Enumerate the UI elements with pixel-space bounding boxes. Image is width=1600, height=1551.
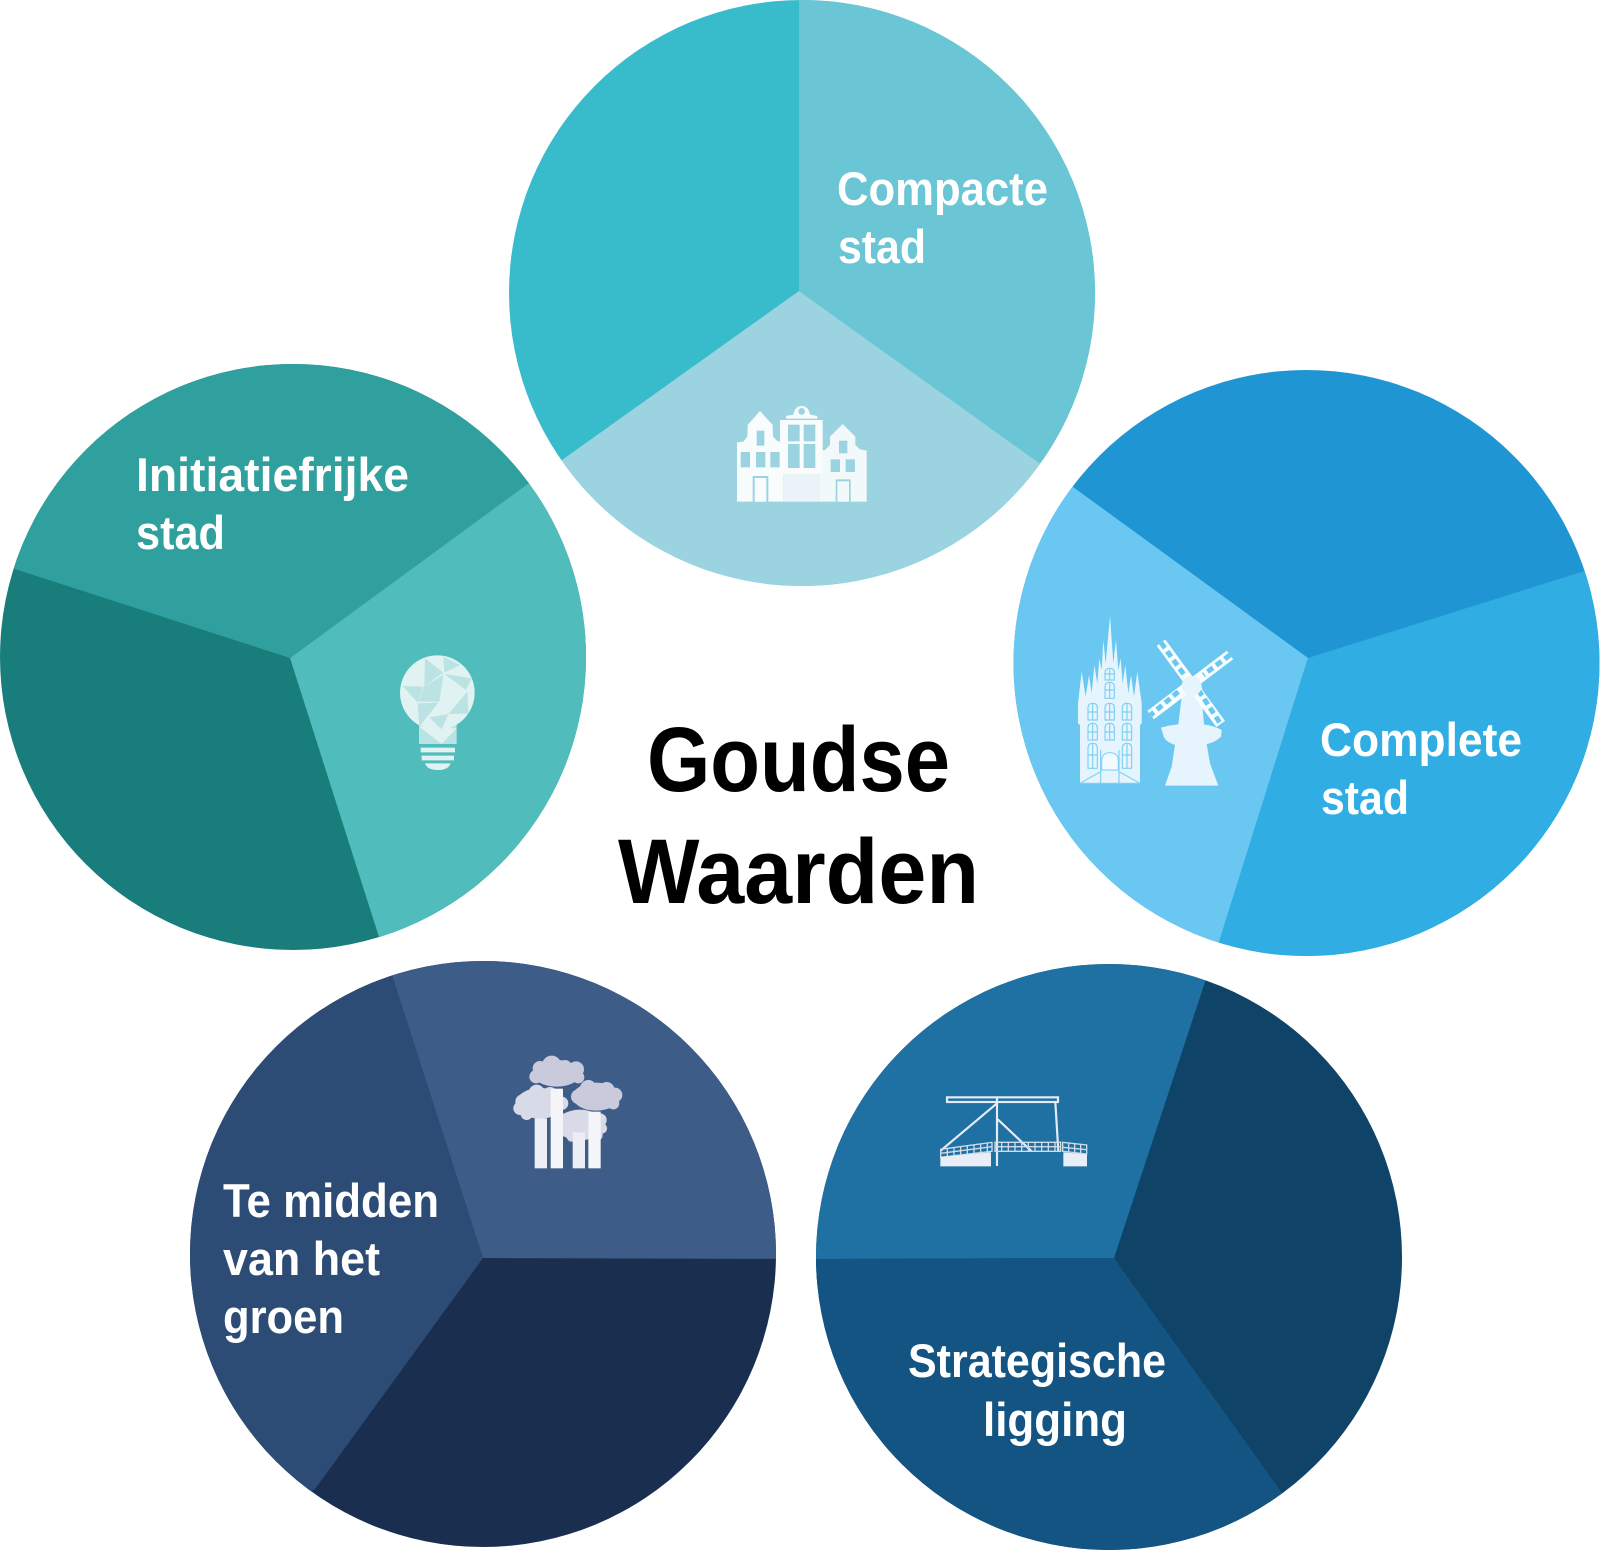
icon: drawbridge (941, 1097, 1087, 1166)
label: Te midden van het groen: groen (223, 1290, 344, 1343)
label: Initiatiefrijke stad: Initiatiefrijke (136, 448, 409, 501)
label: Te midden van het groen (223, 1174, 439, 1343)
label: Initiatiefrijke stad: stad (136, 506, 225, 559)
label: Compacte stad: Compacte (837, 162, 1048, 215)
title: Goudse (647, 709, 950, 811)
pie segments: Initiatiefrijke stad (0, 350, 600, 960)
label: Compacte stad (837, 162, 1048, 273)
label: Te midden van het groen: Te midden (223, 1174, 439, 1227)
pie segments: Strategische ligging (800, 950, 1420, 1551)
label: Strategische ligging: ligging (983, 1393, 1127, 1446)
panel: Compacte stad (509, 0, 1095, 586)
label: Complete stad: Complete (1320, 713, 1522, 766)
label: Complete stad: stad (1321, 771, 1409, 824)
label: Compacte stad: stad (838, 220, 926, 273)
icon: faceted light bulb (400, 655, 475, 770)
pie segments: Complete stad (1000, 360, 1600, 970)
panel: Complete stad (1000, 360, 1600, 970)
label: Complete stad (1320, 713, 1522, 824)
pie segments: Compacte stad (509, 0, 1095, 586)
icon: windmill (1151, 643, 1230, 786)
panel: Te midden van het groen (190, 961, 776, 1547)
pie segments: Te midden van het groen (190, 961, 776, 1547)
title (618, 709, 979, 923)
label: Strategische ligging (908, 1334, 1166, 1446)
label: Te midden van het groen: van het (223, 1232, 380, 1285)
panel: Initiatiefrijke stad (0, 350, 600, 960)
icon: row of canal houses (737, 406, 867, 502)
title: Waarden (618, 821, 979, 923)
label: Strategische ligging: Strategische (908, 1334, 1166, 1387)
label: Initiatiefrijke stad (136, 448, 409, 559)
panel: Strategische ligging (800, 950, 1420, 1551)
icon: trees and buildings (513, 1056, 622, 1168)
icon: Gouda town hall (1078, 616, 1142, 783)
